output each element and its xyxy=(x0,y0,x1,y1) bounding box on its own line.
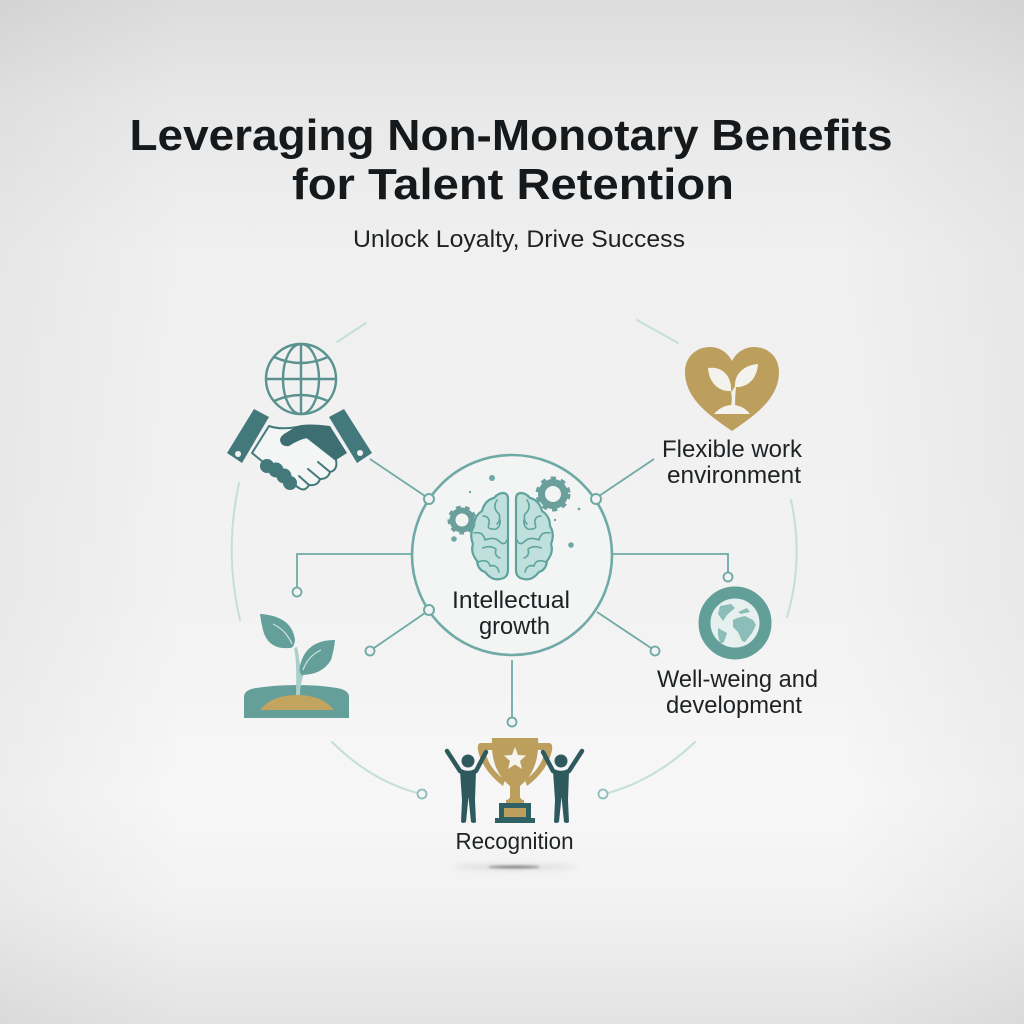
trophy base xyxy=(495,803,535,823)
dark hand xyxy=(280,424,347,460)
label: well-being and development: Well-weing and xyxy=(657,666,818,693)
decorative dots xyxy=(451,475,580,548)
subtitle: Unlock Loyalty, Drive Success xyxy=(353,226,685,253)
left cuff xyxy=(227,409,269,463)
icon: globe xyxy=(266,344,336,414)
icon: gears xyxy=(450,478,568,532)
node dots on central circle xyxy=(424,494,601,615)
outer decorative arcs xyxy=(232,320,797,793)
panel: central circle, intellectual growth: growth xyxy=(479,613,550,640)
icon: brain xyxy=(471,493,553,579)
knuckle blob xyxy=(260,459,297,490)
right cuff xyxy=(329,409,372,463)
right person xyxy=(543,751,582,823)
label: intellectual growth: Intellectual xyxy=(452,587,570,614)
icon: handshake xyxy=(227,409,372,490)
icon: heart with sprout xyxy=(685,347,779,431)
connector lines and nodes xyxy=(292,459,732,798)
trophy cup xyxy=(492,738,538,803)
ground shadow xyxy=(452,864,576,870)
label: flexible work environment: Flexible work xyxy=(662,436,803,463)
icon: plant xyxy=(244,614,349,718)
panel: central circle, intellectual growth xyxy=(412,455,612,655)
label: recognition: Recognition xyxy=(456,828,574,854)
finger lines xyxy=(299,462,330,485)
title xyxy=(130,111,892,209)
label: flexible work environment: environment xyxy=(667,462,801,489)
label: well-being and development: development xyxy=(666,692,802,719)
title: Leveraging Non-Monotary Benefits xyxy=(130,111,892,160)
white hand outline xyxy=(252,426,336,489)
left person xyxy=(447,751,486,823)
icon: trophy with people xyxy=(447,738,582,823)
trophy handles xyxy=(478,743,552,786)
label: well-being and development xyxy=(657,666,818,719)
label: flexible work environment xyxy=(662,436,803,489)
star xyxy=(504,747,526,769)
title: for Talent Retention xyxy=(292,160,734,209)
icon: earth xyxy=(704,592,766,654)
